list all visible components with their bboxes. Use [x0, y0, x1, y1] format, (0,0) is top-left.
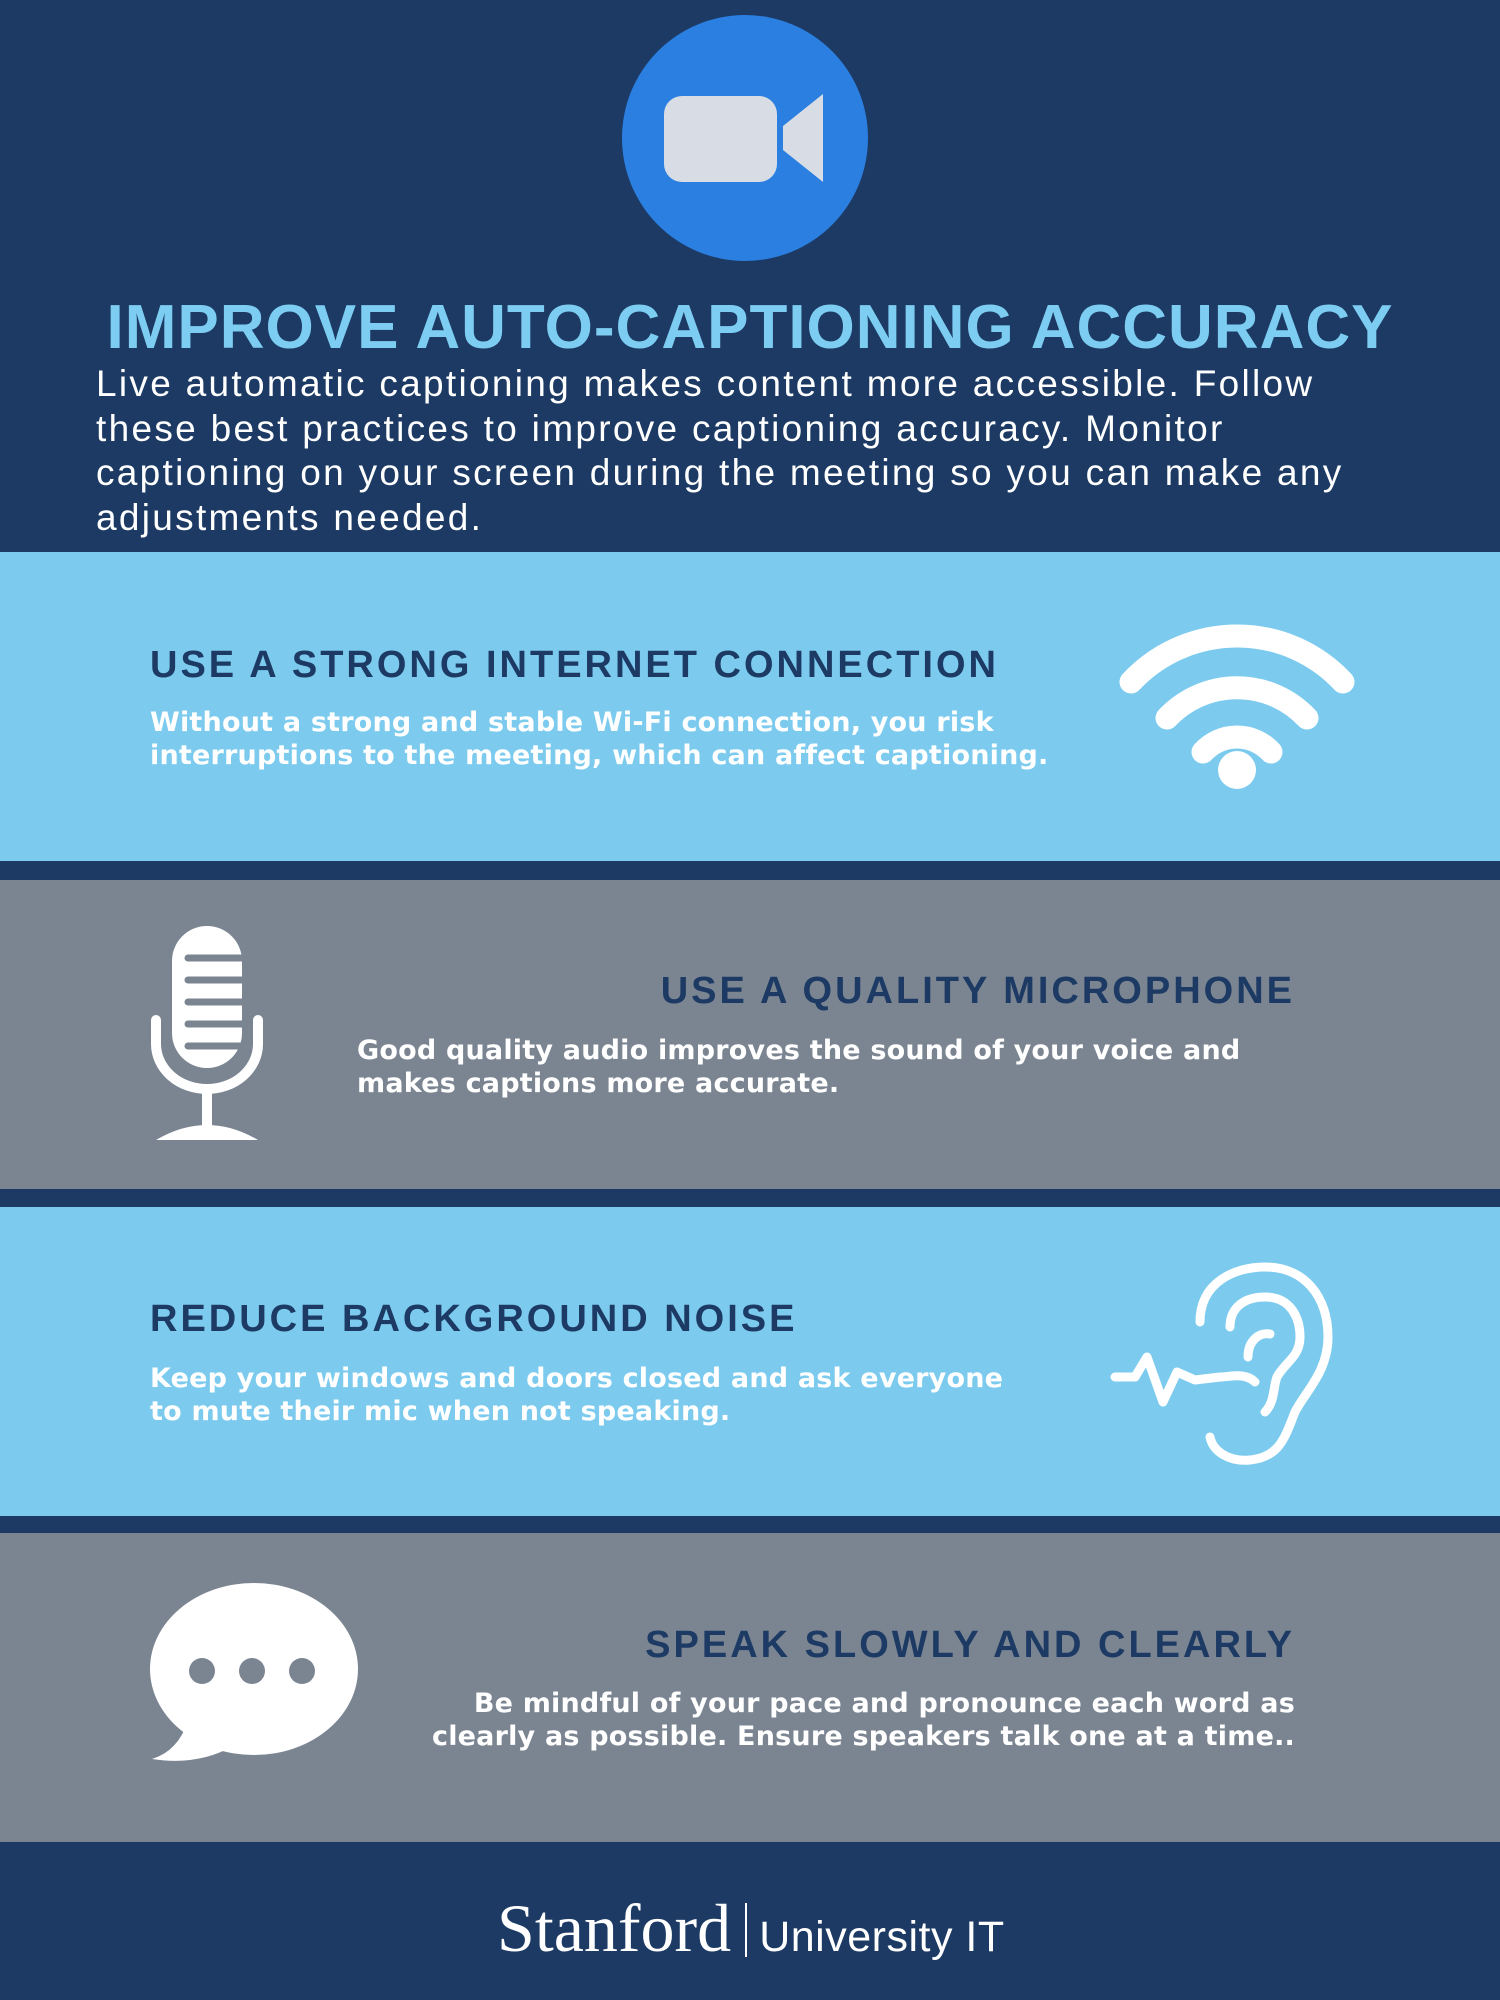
heading: SPEAK SLOWLY AND CLEARLY [645, 1624, 1295, 1666]
panel: internet connection [0, 552, 1500, 861]
text: Be mindful of your pace and pronounce each word as [474, 1688, 1295, 1719]
icon: wifi [1120, 624, 1354, 789]
panel: speak slowly [0, 1533, 1500, 1842]
panel: background noise [0, 1207, 1500, 1516]
text [432, 1688, 1295, 1752]
intro text: Live automatic captioning makes content more accessible. Follow these best practices to improve captioning accuracy. Monitor captioning on your screen during the meeting so you can make any adjustments needed. [96, 363, 1344, 538]
title: IMPROVE AUTO-CAPTIONING ACCURACY [107, 293, 1393, 362]
text: clearly as possible. Ensure speakers talk one at a time.. [432, 1721, 1295, 1752]
text [150, 707, 1048, 771]
text: Good quality audio improves the sound of your voice and [357, 1035, 1240, 1066]
text [150, 1363, 1003, 1427]
text: Without a strong and stable Wi-Fi connection, you risk [150, 707, 994, 738]
heading: USE A QUALITY MICROPHONE [661, 970, 1295, 1012]
heading: USE A STRONG INTERNET CONNECTION [150, 644, 999, 686]
heading: REDUCE BACKGROUND NOISE [150, 1298, 797, 1340]
text [357, 1035, 1240, 1099]
icon: zoom camera [622, 15, 868, 261]
icon: ear [1110, 1262, 1332, 1465]
icon: microphone [151, 926, 263, 1140]
footer logo: Stanford University IT [497, 1890, 1005, 1966]
panel: microphone [0, 880, 1500, 1189]
text: Keep your windows and doors closed and ask everyone [150, 1363, 1003, 1394]
text: to mute their mic when not speaking. [150, 1396, 730, 1427]
icon: speech bubble [150, 1583, 358, 1761]
text: makes captions more accurate. [357, 1068, 839, 1099]
text: interruptions to the meeting, which can affect captioning. [150, 740, 1048, 771]
